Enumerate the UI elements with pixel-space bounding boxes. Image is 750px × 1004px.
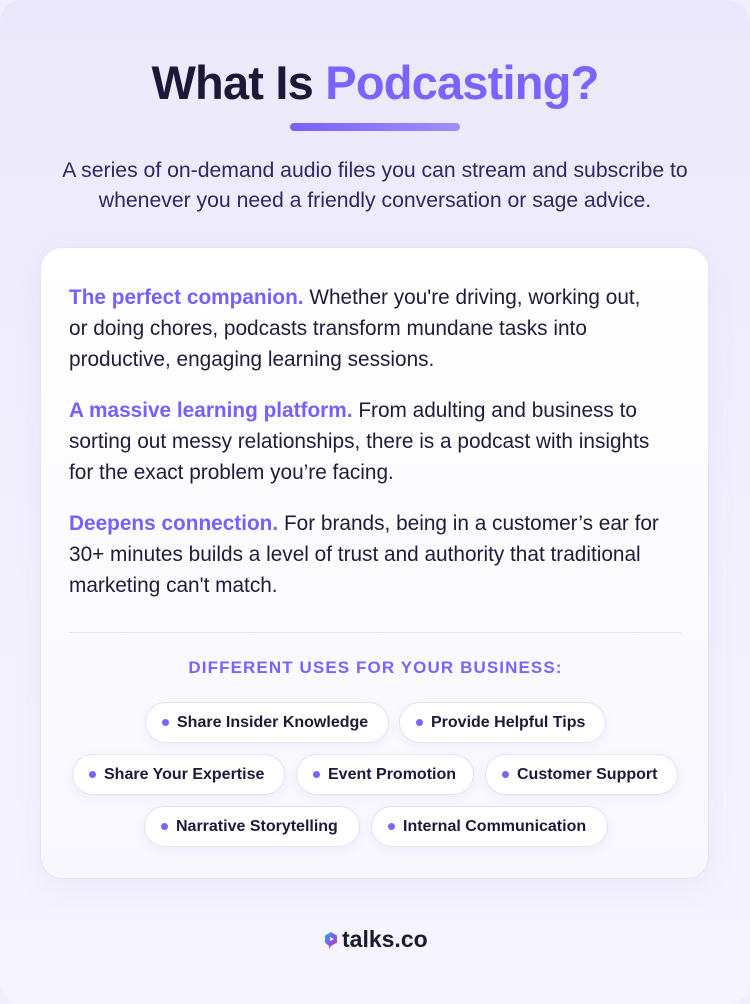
logo: talks.co [342, 926, 428, 952]
text: learning platform: A massive learning platform. From adulting and business to [69, 399, 637, 422]
heading: uses: DIFFERENT USES FOR YOUR BUSINESS: [188, 658, 563, 677]
text: learning platform [69, 399, 649, 484]
panel: main card [40, 247, 709, 879]
pill: customer support [485, 754, 678, 795]
pill: event promotion: Event Promotion [328, 766, 456, 783]
pill: helpful tips: Provide Helpful Tips [431, 714, 585, 731]
pill: insider knowledge: Share Insider Knowledge [177, 714, 368, 731]
text: perfect companion: The perfect companion. Whether you're driving, working out, [69, 286, 640, 309]
text: perfect companion [69, 286, 640, 371]
pill: customer support: Customer Support [517, 766, 657, 783]
pill: expertise: Share Your Expertise [104, 766, 264, 783]
text: deepens connection: marketing can't match. [69, 574, 278, 597]
text: perfect companion: or doing chores, podcasts transform mundane tasks into [69, 317, 587, 340]
pill: internal communication [371, 806, 608, 847]
title: What Is Podcasting? [151, 56, 598, 109]
text: deepens connection [69, 512, 659, 597]
text: deepens connection: 30+ minutes builds a level of trust and authority that traditional [69, 543, 641, 566]
pill: insider knowledge [145, 702, 389, 743]
pill: internal communication: Internal Communication [403, 818, 586, 835]
text: learning platform: for the exact problem you’re facing. [69, 461, 394, 484]
subtitle [62, 159, 688, 212]
pill: storytelling: Narrative Storytelling [176, 818, 338, 835]
title underline [290, 123, 460, 131]
pill: storytelling [144, 806, 360, 847]
text: perfect companion: productive, engaging learning sessions. [69, 348, 434, 371]
subtitle: A series of on-demand audio files you can stream and subscribe to [62, 159, 688, 182]
pill: expertise [72, 754, 285, 795]
text: deepens connection: Deepens connection. For brands, being in a customer’s ear for [69, 512, 659, 535]
pill: event promotion [296, 754, 474, 795]
text: learning platform: sorting out messy relationships, there is a podcast with insights [69, 430, 649, 453]
subtitle: whenever you need a friendly conversation or sage advice. [99, 189, 651, 212]
pill: helpful tips [399, 702, 606, 743]
